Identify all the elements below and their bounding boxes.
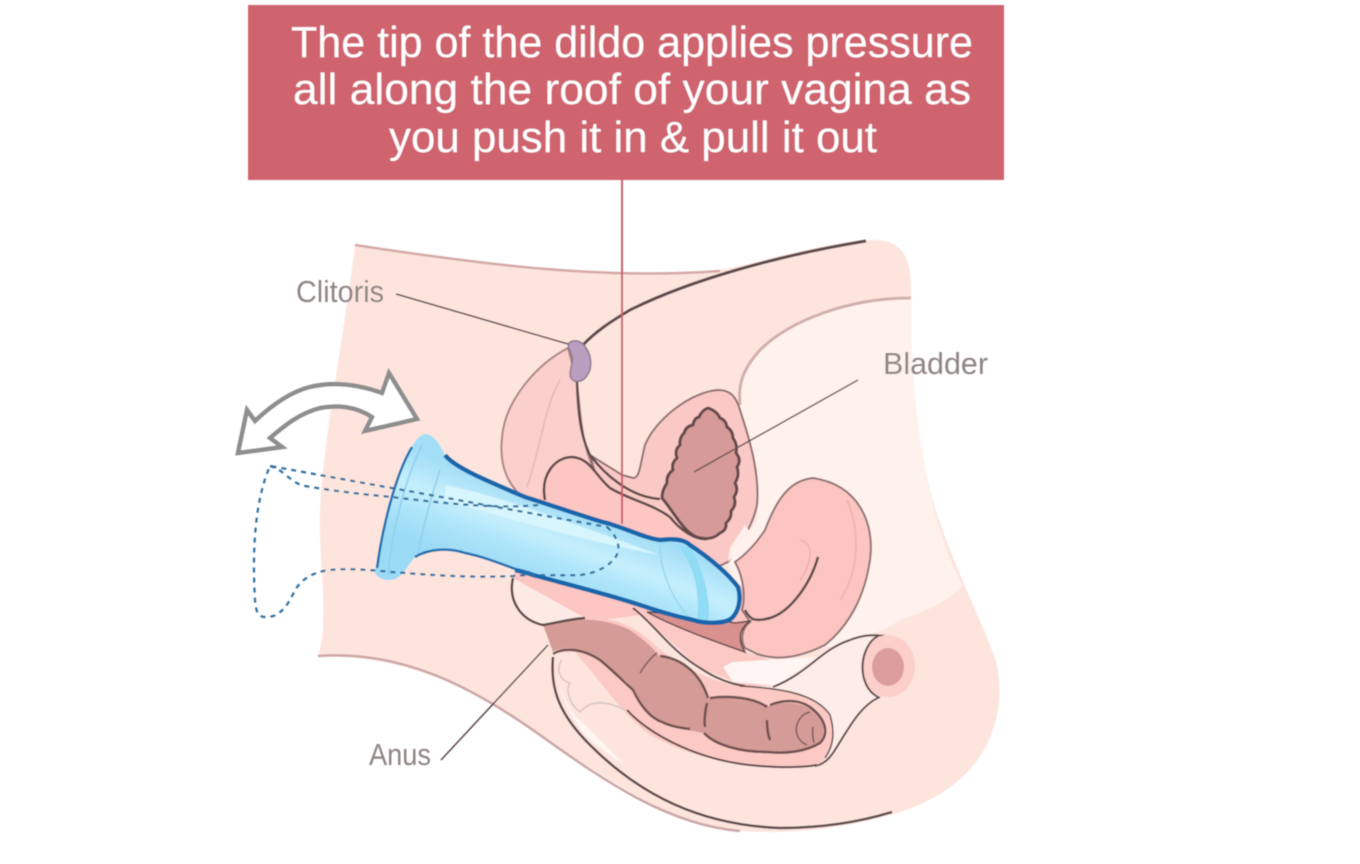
pubic contour line <box>583 241 866 345</box>
posterior fornix <box>647 612 750 652</box>
coccyx <box>559 662 628 767</box>
callout text <box>291 18 973 162</box>
peritoneum line <box>740 298 911 405</box>
tissue between vagina and rectum <box>633 608 777 686</box>
rectal opening <box>861 635 915 697</box>
callout text: all along the roof of your vagina as <box>293 65 971 114</box>
arrow: in and out motion <box>238 373 417 453</box>
callout leader line <box>621 180 623 524</box>
vaginal wall line <box>577 382 660 499</box>
pelvic floor line <box>633 608 745 686</box>
bowel interior <box>543 620 824 753</box>
label: Bladder <box>694 346 988 472</box>
labia lower fold <box>512 578 585 625</box>
abdominal cavity <box>728 298 962 660</box>
panel: header callout <box>248 5 1004 180</box>
base flare rim <box>388 445 440 575</box>
sacrum line <box>552 657 892 828</box>
panel: rectum and bowel <box>543 608 915 768</box>
label: Anus <box>369 645 548 772</box>
label: Clitoris: Clitoris <box>296 274 384 309</box>
dashed outline: withdrawn position <box>254 466 619 617</box>
panel: blue dildo <box>375 434 740 623</box>
glans ridge <box>678 545 709 622</box>
labia outline <box>544 457 707 539</box>
upper abdomen line <box>355 245 720 274</box>
label: Bladder: Bladder <box>883 346 988 381</box>
dildo outline <box>445 455 740 623</box>
rectum wall <box>553 618 833 768</box>
bladder wall <box>590 390 758 575</box>
tube <box>773 635 885 766</box>
vaginal canal tissue <box>512 457 750 650</box>
bladder interior <box>662 408 739 539</box>
panel: body cross-section <box>318 240 1000 832</box>
vulva tissue <box>501 348 600 510</box>
white patch between organs <box>723 657 817 686</box>
callout text: The tip of the dildo applies pressure <box>291 18 973 67</box>
callout text: you push it in & pull it out <box>389 113 877 162</box>
bowel outlines <box>553 650 825 753</box>
label: Anus: Anus <box>369 737 431 772</box>
icon: clitoris <box>568 341 591 381</box>
label: Clitoris <box>296 274 568 344</box>
buttock line <box>318 655 740 831</box>
cervix line <box>745 557 818 620</box>
shaft highlight <box>445 485 660 555</box>
uterus cavity highlight <box>728 525 756 562</box>
panel: uterus <box>728 478 871 657</box>
